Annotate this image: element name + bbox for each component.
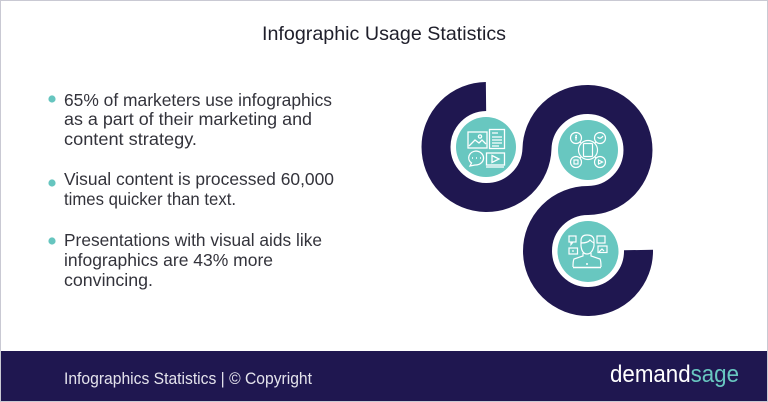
title: Infographic Usage Statistics <box>262 23 506 45</box>
bullet 2: times quicker than text. <box>64 189 236 209</box>
bullet 1: content strategy. <box>64 129 197 149</box>
bullet 2 <box>48 169 334 209</box>
icon: social media phone <box>558 120 618 180</box>
logo: demandsage: demandsage <box>610 361 739 388</box>
bullet 1: as a part of their marketing and <box>64 109 312 129</box>
icon: person at laptop <box>558 221 618 282</box>
bullet 1 <box>48 90 332 149</box>
icon: content types <box>456 117 516 177</box>
bullet 1: 65% of marketers use infographics <box>64 90 332 110</box>
bullet 3: infographics are 43% more <box>64 250 273 270</box>
panel: footer bar <box>1 351 767 401</box>
bullet 3 <box>48 230 322 290</box>
bullet 3: Presentations with visual aids like <box>64 230 322 250</box>
footer text: Infographics Statistics | © Copyright <box>64 370 312 388</box>
bullet 3: convincing. <box>64 270 153 290</box>
S-curve ribbon <box>436 96 639 302</box>
bullet 2: Visual content is processed 60,000 <box>64 169 334 189</box>
panel: bullet list <box>48 90 334 290</box>
